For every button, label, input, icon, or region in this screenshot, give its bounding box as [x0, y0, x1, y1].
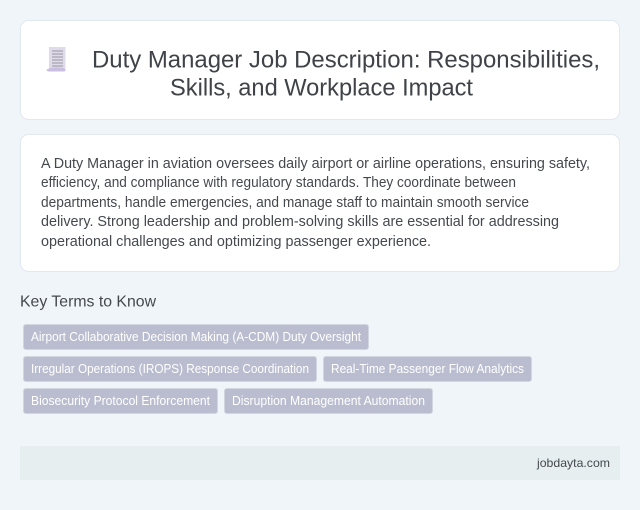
icon: document scroll [46, 47, 66, 72]
tag: biosecurity: Biosecurity Protocol Enforcement [31, 394, 211, 408]
title: Skills, and Workplace Impact [170, 74, 473, 102]
description text: efficiency, and compliance with regulatory standards. They coordinate between [41, 175, 516, 191]
panel: title card [20, 20, 620, 120]
tag: IROPS: Irregular Operations (IROPS) Response Coordination [31, 362, 309, 376]
tag: A-CDM [24, 324, 368, 350]
footer bar [20, 446, 620, 480]
tag: passenger flow: Real-Time Passenger Flow Analytics [331, 362, 524, 376]
panel: description card [20, 134, 620, 272]
tag: A-CDM: Airport Collaborative Decision Making (A-CDM) Duty Oversight [31, 330, 361, 344]
heading: key terms: Key Terms to Know [20, 294, 156, 310]
footer bar: jobdayta.com [536, 456, 610, 470]
tag: disruption [224, 388, 432, 414]
description text: A Duty Manager in aviation oversees daily airport or airline operations, ensuring safety, [41, 156, 590, 172]
description text: delivery. Strong leadership and problem-solving skills are essential for addressing [41, 214, 559, 230]
tag: passenger flow [324, 356, 532, 382]
title [92, 46, 600, 102]
tag: disruption: Disruption Management Automation [232, 394, 425, 408]
tag: biosecurity [24, 388, 218, 414]
title: Duty Manager Job Description: Responsibilities, [92, 46, 600, 74]
description text: departments, handle emergencies, and manage staff to maintain smooth service [41, 195, 529, 211]
description text: operational challenges and optimizing passenger experience. [41, 234, 431, 250]
tag: IROPS [24, 356, 316, 382]
description text [41, 156, 590, 250]
